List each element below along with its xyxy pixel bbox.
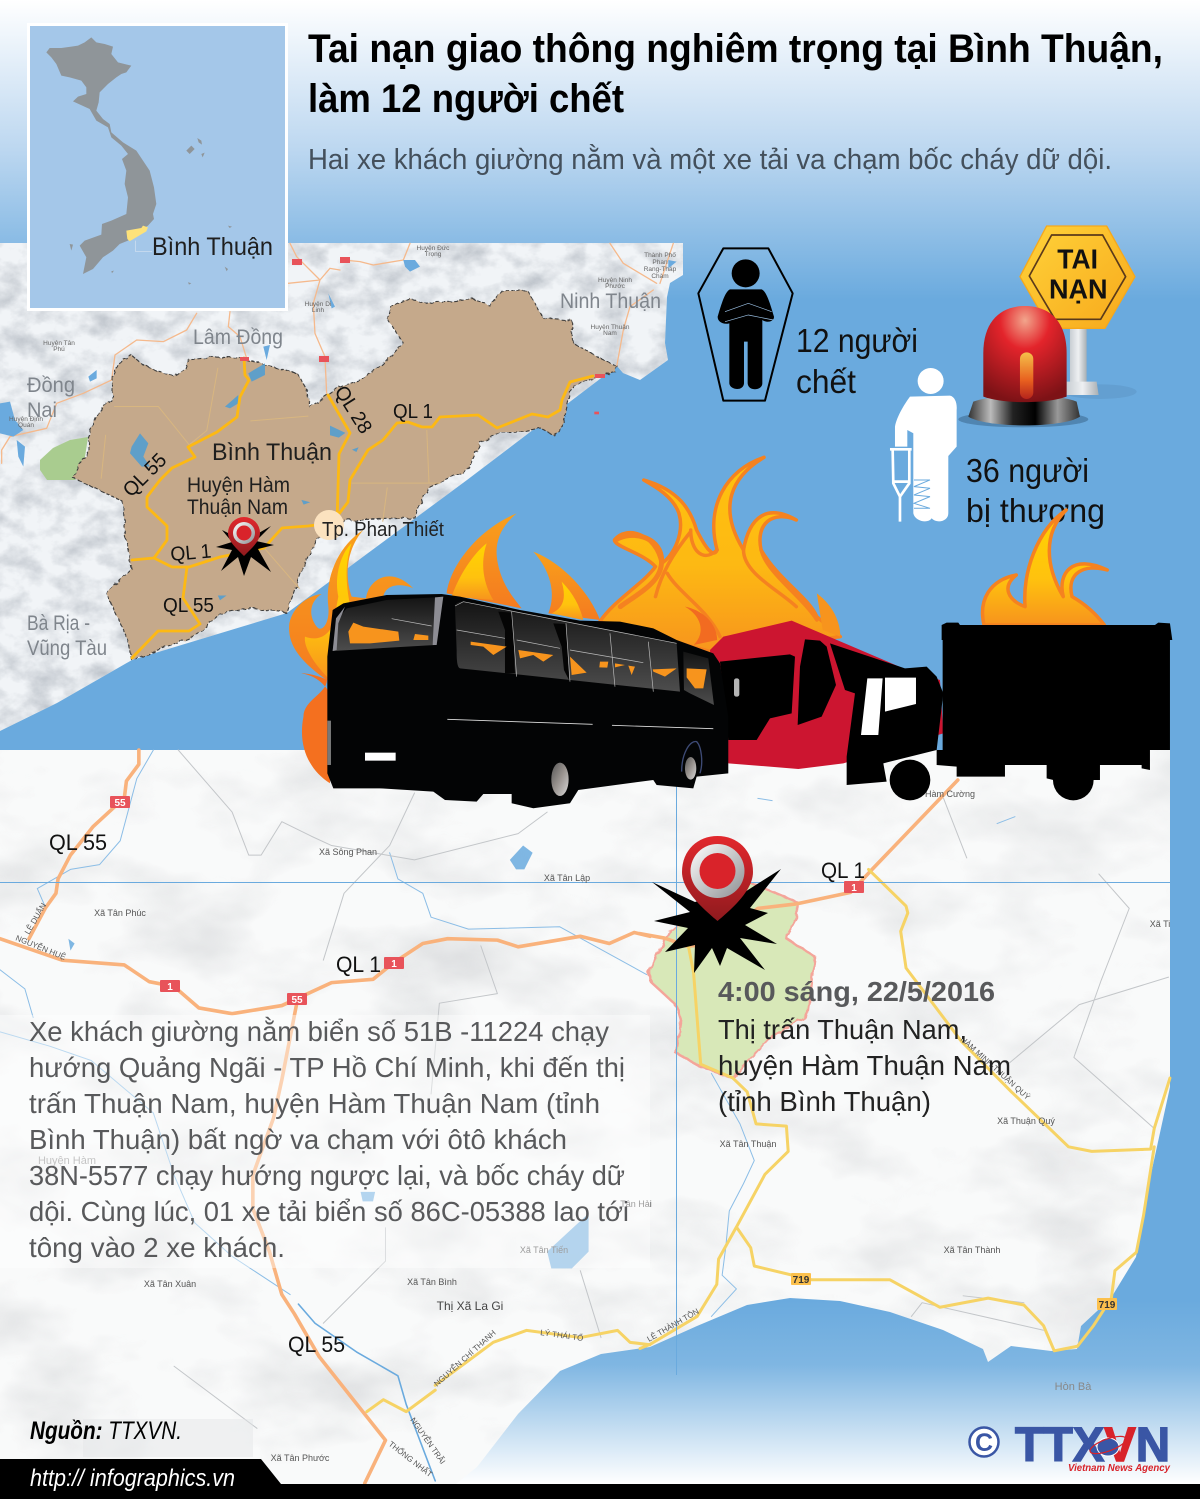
icon: accident road sign bbox=[1020, 226, 1137, 399]
highway labels: QL 55 bbox=[49, 830, 107, 855]
text panel: accident description: dội. Cùng lúc, 01 xe tải biển số 86C-05388 lao tới bbox=[29, 1196, 629, 1227]
street names: LÊ DUẨN bbox=[23, 901, 48, 936]
stat: 36 injured: bị thương bbox=[966, 492, 1105, 529]
street names: NGUYỄN TRÃI bbox=[408, 1416, 447, 1466]
provincial roads and lakes bbox=[101, 357, 605, 658]
truck cab bbox=[830, 643, 943, 785]
red coach windows bbox=[720, 654, 795, 740]
highway labels: QL 55 bbox=[288, 1332, 345, 1357]
commune place names: Thị Xã La Gi bbox=[437, 1299, 503, 1313]
map: Vietnam silhouette bbox=[46, 37, 232, 285]
place names on neighbouring land: Huyện Định bbox=[9, 416, 43, 423]
street names: HÀM MINH-THUẬN QUÝ bbox=[959, 1035, 1032, 1102]
callout: time and place of accident: huyện Hàm Thuận Nam bbox=[718, 1050, 1011, 1081]
black coach bbox=[327, 594, 728, 808]
title: làm 12 người chết bbox=[308, 77, 624, 121]
footer bar bbox=[0, 1459, 1200, 1499]
left flames bbox=[289, 513, 600, 683]
icon: accident road sign: NẠN bbox=[1049, 273, 1108, 304]
map: upper regional map bbox=[0, 243, 684, 733]
place names on neighbouring land: Rang-Tháp bbox=[644, 266, 677, 273]
callout: time and place of accident bbox=[718, 976, 1011, 1117]
street names bbox=[14, 901, 1032, 1479]
place names on neighbouring land: Thành Phố bbox=[644, 250, 676, 259]
truck wheels bbox=[890, 760, 930, 800]
right flame over truck bbox=[983, 510, 1107, 625]
commune place names: Xã Tân Xuân bbox=[144, 1279, 196, 1289]
province and district labels: Bình Thuận bbox=[212, 439, 332, 466]
place names on neighbouring land: Huyện Di bbox=[305, 301, 331, 308]
road shields: 55 bbox=[291, 995, 303, 1006]
place names on neighbouring land: Huyện Ninh bbox=[598, 277, 632, 284]
street names: LÝ THÁI TỔ bbox=[540, 1328, 584, 1343]
icon: accident road sign: TAI bbox=[1057, 243, 1098, 274]
road labels: QL 28 bbox=[330, 382, 376, 438]
text panel: accident description: tông vào 2 xe khách. bbox=[29, 1232, 285, 1263]
central flames bbox=[600, 457, 840, 653]
neighbouring province labels: Vũng Tàu bbox=[27, 637, 107, 660]
commune place names bbox=[38, 789, 1170, 1463]
commune place names: Xã Tân Phước bbox=[271, 1453, 330, 1463]
neighbouring province labels: Đồng bbox=[27, 374, 75, 397]
title bbox=[308, 27, 1163, 121]
coach details bbox=[447, 719, 713, 729]
neighbouring roads and water bbox=[0, 243, 677, 480]
road shields bbox=[110, 796, 1117, 1311]
place names on neighbouring land: Phước bbox=[605, 283, 626, 290]
place names on neighbouring land: Linh bbox=[312, 307, 325, 314]
highway labels bbox=[49, 830, 865, 1357]
icon: small accident marker bbox=[216, 517, 274, 576]
coach windows bbox=[333, 597, 435, 651]
rear low flame bbox=[301, 673, 336, 783]
road labels: QL 55 bbox=[119, 449, 171, 502]
rivers and lakes bbox=[0, 750, 647, 1481]
place names on neighbouring land: Chàm bbox=[651, 273, 669, 280]
crosshair lines bbox=[0, 750, 1170, 1375]
neighbouring province labels: Nai bbox=[27, 399, 57, 422]
neighbouring province labels: Ninh Thuận bbox=[560, 290, 661, 313]
commune place names: Xã Thuận Quý bbox=[997, 1116, 1055, 1126]
stat: 12 dead: chết bbox=[796, 363, 856, 400]
commune place names: Xã Tân Tiến bbox=[520, 1245, 568, 1255]
logo: TTXVN: Vietnam News Agency bbox=[1068, 1462, 1171, 1474]
panel: inset map of Vietnam bbox=[28, 24, 286, 310]
source note bbox=[30, 1417, 253, 1457]
label: Bình Thuận: Bình Thuận bbox=[152, 233, 273, 261]
commune place names: Hàm Cường bbox=[925, 789, 975, 799]
street names: THỐNG NHẤT bbox=[387, 1439, 435, 1479]
road labels: QL 1 bbox=[393, 401, 433, 423]
icon: large accident marker bbox=[652, 836, 781, 973]
callout: time and place of accident: Thị trấn Thuận Nam, bbox=[718, 1014, 967, 1045]
neighbouring province labels: Bà Rịa - bbox=[27, 612, 90, 635]
road labels: QL 55 bbox=[163, 595, 214, 617]
logo: TTXVN: TTXVN bbox=[1015, 1419, 1170, 1472]
stat: 36 injured bbox=[966, 452, 1105, 529]
land around Bình Thuận bbox=[0, 243, 683, 731]
highway labels: QL 1 bbox=[336, 952, 381, 977]
place names on neighbouring land: Quán bbox=[18, 422, 34, 429]
icon: red alarm beacon bbox=[958, 306, 1088, 427]
icon: coffin with person bbox=[698, 248, 793, 401]
source note: Nguồn: TTXVN. bbox=[30, 1417, 182, 1445]
neighbouring province labels bbox=[27, 290, 661, 660]
city marker: Phan Thiết bbox=[314, 510, 444, 541]
logo: TTXVN: C bbox=[975, 1429, 993, 1457]
province: Bình Thuận bbox=[73, 290, 617, 660]
commune place names: Xã Sông Phan bbox=[319, 847, 377, 857]
place names on neighbouring land: Huyện Thuận bbox=[591, 324, 630, 331]
road shields: 1 bbox=[851, 883, 857, 894]
street names: NGUYỄN HUỆ bbox=[14, 934, 67, 962]
text panel: accident description: trấn Thuận Nam, huyện Hàm Thuận Nam (tỉnh bbox=[29, 1088, 600, 1119]
highway QL 55 bbox=[29, 750, 385, 1483]
road shields: 719 bbox=[793, 1275, 810, 1286]
provincial roads bbox=[367, 869, 1170, 1412]
commune place names: Huyện Hàm bbox=[38, 1155, 96, 1167]
stat: 12 dead: 12 người bbox=[796, 322, 918, 359]
place names on neighbouring land: Trọng bbox=[425, 251, 442, 258]
text panel: accident description: Xe khách giường nằm biển số 51B -11224 chạy bbox=[29, 1016, 609, 1047]
place names on neighbouring land: Phú bbox=[53, 346, 65, 353]
commune place names: Tân Hải bbox=[620, 1199, 652, 1209]
text panel: accident description: Bình Thuận) bất ngờ va chạm với ôtô khách bbox=[29, 1124, 567, 1155]
commune place names: Xã Tân Lập bbox=[544, 873, 590, 883]
neighbouring province labels: Lâm Đồng bbox=[193, 326, 283, 349]
highway QL 1 bbox=[0, 780, 958, 1014]
commune place names: Xã Ti bbox=[1150, 919, 1170, 929]
highway labels: QL 1 bbox=[821, 858, 865, 883]
stat: 12 dead bbox=[796, 322, 918, 400]
city marker: Phan Thiết: Tp. Phan Thiết bbox=[322, 519, 444, 541]
street names: NGUYỄN CHÍ THANH bbox=[432, 1328, 498, 1388]
place names on neighbouring land bbox=[9, 245, 677, 429]
road shields: 719 bbox=[1099, 1300, 1116, 1311]
subtitle: Hai xe khách giường nằm và một xe tải va chạm bốc cháy dữ dội. bbox=[308, 143, 1112, 176]
province and district labels: Thuận Nam bbox=[187, 496, 288, 519]
commune place names: Xã Tân Bình bbox=[407, 1277, 457, 1287]
commune place names: Hòn Bà bbox=[1055, 1381, 1092, 1393]
road shields: 55 bbox=[114, 798, 126, 809]
province and district labels bbox=[187, 439, 332, 519]
callout: time and place of accident: (tỉnh Bình Thuận) bbox=[718, 1086, 931, 1117]
icon: injured person with crutch bbox=[890, 368, 957, 522]
commune place names: Xã Tân Phúc bbox=[94, 908, 146, 918]
fire glimpsed through windows bbox=[348, 623, 707, 688]
map: lower detail map bbox=[0, 750, 1170, 1484]
place names on neighbouring land: Huyện Đức bbox=[417, 245, 450, 252]
small red road shields bbox=[292, 257, 350, 362]
place names on neighbouring land: Huyện Tân bbox=[43, 340, 75, 347]
text panel: accident description bbox=[0, 1015, 650, 1268]
commune place names: Xã Tân Thành bbox=[944, 1245, 1000, 1255]
title: Tai nạn giao thông nghiêm trọng tại Bình Thuận, bbox=[308, 27, 1163, 71]
road shields: 1 bbox=[167, 982, 173, 993]
road labels: QL 1 bbox=[170, 540, 212, 566]
road labels bbox=[119, 382, 433, 617]
stat: 36 injured: 36 người bbox=[966, 452, 1089, 489]
curtains and pillars bbox=[498, 612, 569, 681]
place names on neighbouring land: Phan bbox=[652, 259, 668, 266]
province and district labels: Huyện Hàm bbox=[187, 474, 290, 497]
truck bbox=[830, 623, 1172, 800]
website url: http:// infographics.vn bbox=[30, 1465, 235, 1492]
red coach bbox=[710, 621, 943, 769]
district: Hàm Thuận Nam bbox=[649, 881, 815, 1078]
road shields: 1 bbox=[391, 959, 397, 970]
text panel: accident description: 38N-5577 chạy hướng ngược lại, và bốc cháy dữ bbox=[29, 1160, 625, 1191]
flames behind vehicles bbox=[289, 457, 1107, 783]
street names: LÊ THÀNH TÔN bbox=[646, 1307, 701, 1344]
place names on neighbouring land: Nam bbox=[603, 330, 617, 337]
text panel: accident description: hướng Quảng Ngãi - TP Hồ Chí Minh, khi đến thị bbox=[29, 1052, 625, 1083]
commune place names: Xã Tân Thuận bbox=[720, 1139, 776, 1149]
truck container bbox=[937, 623, 1172, 780]
callout: time and place of accident: 4:00 sáng, 22/5/2016 bbox=[718, 976, 995, 1007]
